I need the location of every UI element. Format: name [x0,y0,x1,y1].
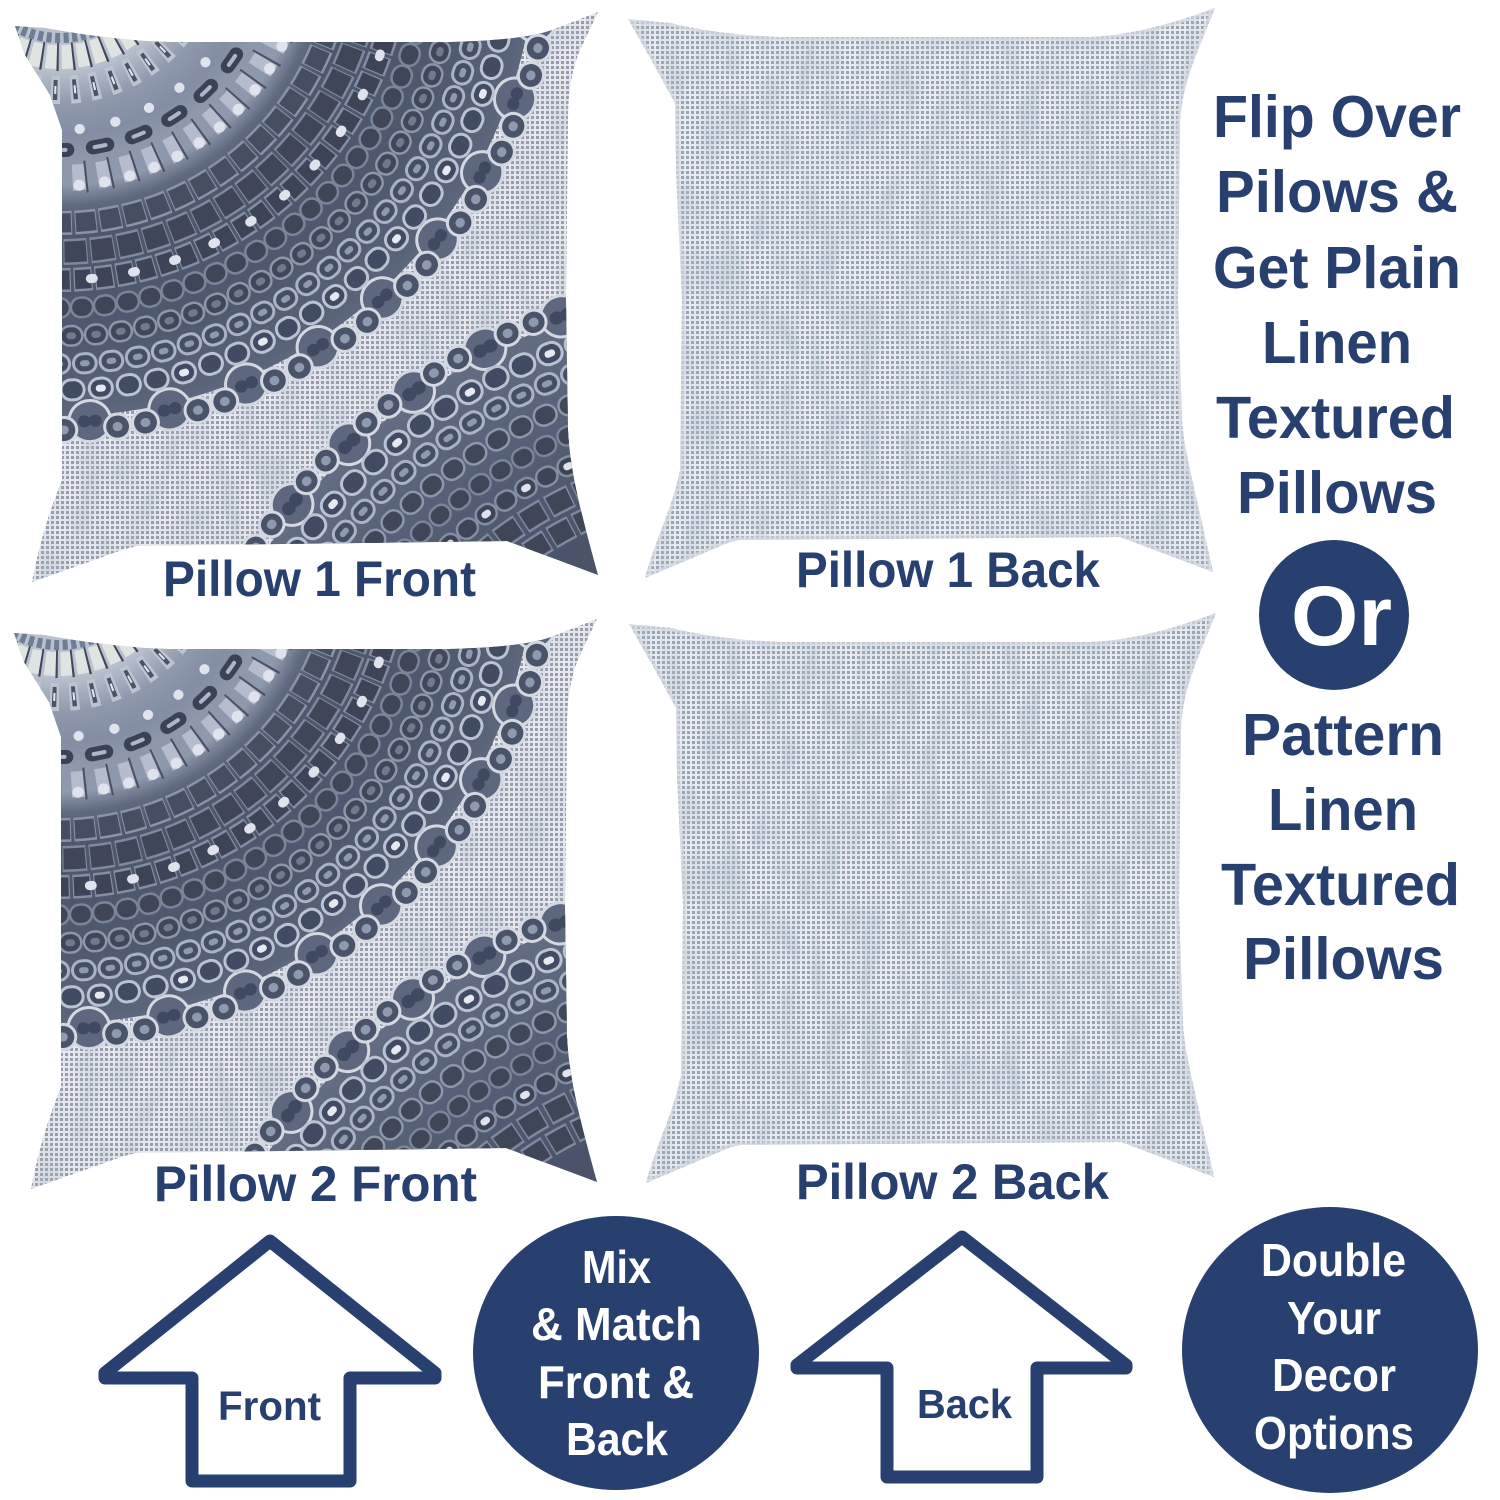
label: pillow 2 back: Pillow 2 Back [796,1154,1109,1210]
text block: flip over plain option [1213,84,1461,526]
arrow: back: Back [917,1381,1012,1427]
panel: pillow 1 back [620,0,1230,590]
panel: pillow 2 back [621,605,1231,1195]
badge: double your decor options: Decor [1272,1349,1396,1401]
label: pillow 2 front: Pillow 2 Front [154,1156,477,1212]
text block: flip over plain option: Linen [1262,310,1412,376]
label: pillow 1 back: Pillow 1 Back [796,542,1100,598]
badge: double your decor options [1182,1207,1478,1493]
text block: flip over plain option: Pilows & [1216,159,1458,225]
arrow: back [797,1237,1126,1477]
badge: double your decor options: Your [1287,1292,1381,1344]
text block: flip over plain option: Pillows [1237,460,1437,526]
panel: pillow 1 front [0,0,686,712]
badge: or: Or [1291,569,1392,663]
badge: double your decor options: Double [1261,1234,1406,1286]
badge: mix and match: Front & [538,1356,694,1408]
text block: pattern option: Pillows [1243,926,1444,992]
text block: pattern option: Pattern [1242,702,1444,768]
badge: mix and match: & Match [531,1298,702,1350]
badge: double your decor options: Options [1254,1407,1414,1459]
label: pillow 1 front: Pillow 1 Front [163,551,476,607]
text block: pattern option: Textured [1221,852,1460,918]
arrow: front [105,1241,435,1481]
text block: flip over plain option: Get Plain [1213,235,1461,301]
badge: mix and match: Mix [582,1241,651,1293]
badge: or [1259,540,1409,690]
badge: mix and match: Back [566,1413,668,1465]
text block: pattern option: Linen [1268,777,1418,843]
badge: mix and match [473,1216,759,1490]
panel: pillow 2 front [0,57,685,1319]
arrow: front: Front [218,1383,321,1429]
text block: flip over plain option: Textured [1216,385,1455,451]
text block: flip over plain option: Flip Over [1213,84,1461,150]
text block: pattern option [1221,702,1460,992]
